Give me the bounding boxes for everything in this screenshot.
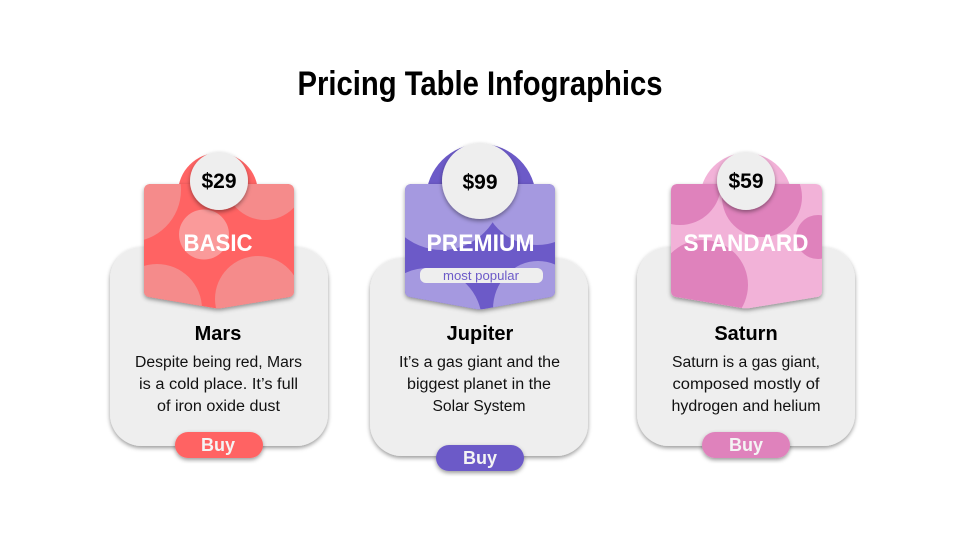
most popular tag: [420, 268, 543, 283]
top semicircle: [700, 153, 792, 245]
title: Pricing Table Infographics: [298, 65, 662, 103]
description: Solar System: [432, 398, 526, 415]
shield badge: [402, 183, 558, 314]
description: [135, 354, 302, 415]
description: Saturn is a gas giant,: [672, 354, 820, 371]
buy button: Buy: [201, 435, 235, 455]
plan name: BASIC: [184, 230, 252, 257]
top semicircle: [178, 153, 258, 233]
price circle: $99: [462, 171, 498, 194]
description: hydrogen and helium: [672, 398, 820, 415]
description: of iron oxide dust: [157, 398, 281, 415]
panel: Jupiter premium plan: [370, 130, 592, 471]
most popular tag: most popular: [443, 268, 520, 283]
buy button: [175, 432, 263, 458]
buy button: [702, 432, 790, 458]
description: [399, 354, 560, 415]
shield badge: [141, 183, 297, 313]
card background: [637, 247, 855, 446]
heading: Saturn: [714, 323, 778, 345]
card background: [110, 247, 328, 446]
buy button: Buy: [463, 448, 497, 468]
description: composed mostly of: [672, 376, 820, 393]
description: [672, 354, 820, 415]
price circle: [442, 143, 518, 219]
price circle: $59: [728, 170, 764, 193]
panel: Mars basic plan: [107, 151, 331, 463]
price circle: $29: [201, 170, 237, 193]
panel: Saturn standard plan: [637, 143, 855, 458]
description: Despite being red, Mars: [135, 354, 302, 371]
description: is a cold place. It’s full: [139, 376, 298, 393]
top semicircle: [426, 144, 536, 254]
buy button: Buy: [729, 435, 763, 455]
plan name: PREMIUM: [426, 230, 534, 257]
heading: Mars: [195, 323, 241, 345]
buy button: [436, 445, 524, 471]
plan name: STANDARD: [684, 230, 808, 257]
price circle: [190, 152, 248, 210]
price circle: [717, 152, 775, 210]
description: It’s a gas giant and the: [399, 354, 560, 371]
heading: Jupiter: [447, 323, 514, 345]
card background: [370, 258, 588, 456]
shield badge: [668, 183, 825, 313]
description: biggest planet in the: [407, 376, 551, 393]
